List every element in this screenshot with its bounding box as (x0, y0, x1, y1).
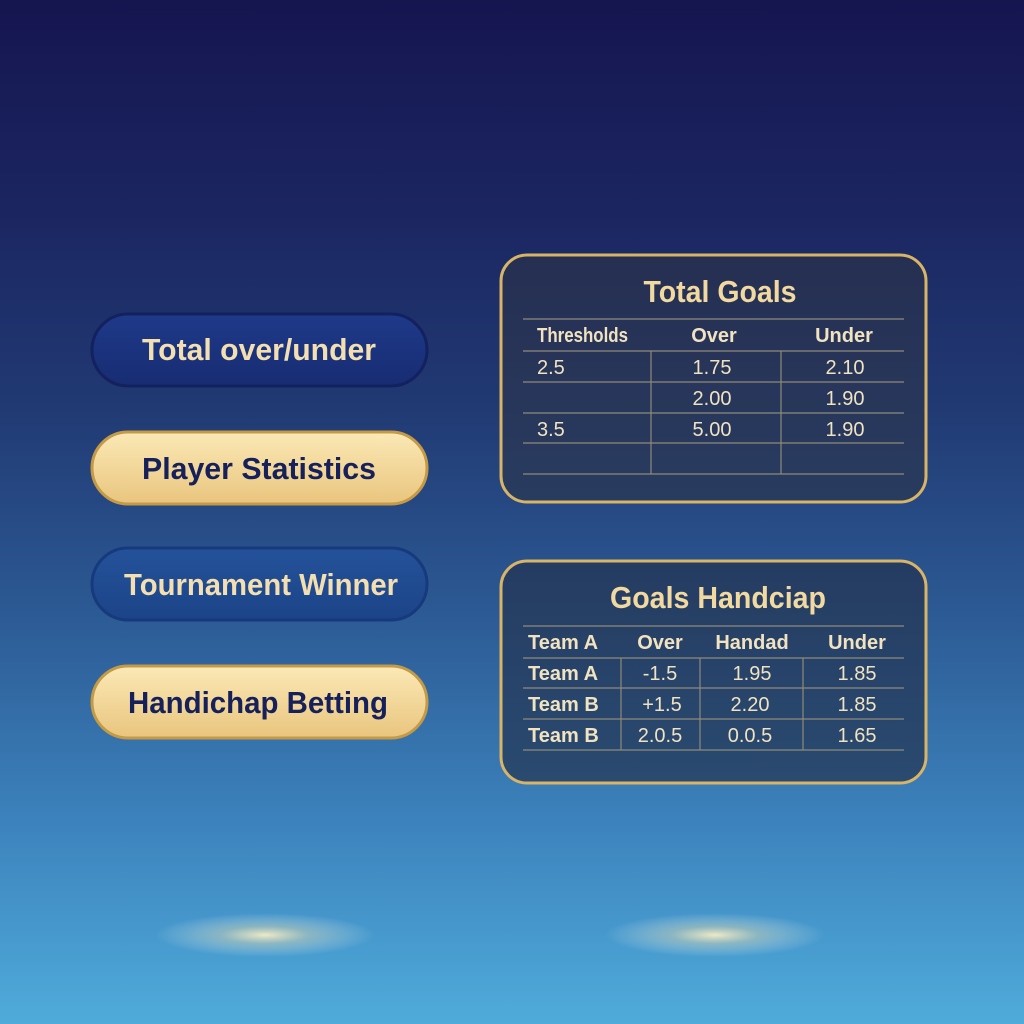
table: goals handicap (528, 632, 886, 747)
floor glow left (155, 913, 375, 957)
button: Handichap Betting: Handichap Betting (128, 685, 388, 720)
table: total goals: 2.5 (537, 357, 565, 379)
title: Goals Handciap: Goals Handciap (610, 580, 826, 615)
table: goals handicap: -1.5 (643, 663, 677, 685)
table: goals handicap: +1.5 (642, 694, 682, 716)
table: goals handicap: Handad (715, 632, 789, 654)
table: goals handicap: 1.65 (838, 725, 876, 747)
table: total goals: 2.00 (693, 388, 731, 410)
table: total goals (537, 325, 873, 441)
table: goals handicap: Over (637, 632, 683, 654)
table: total goals: 1.90 (826, 419, 864, 441)
floor glow right (605, 913, 825, 957)
table: goals handicap: Under (828, 632, 886, 654)
table: goals handicap: 1.85 (838, 694, 876, 716)
table: total goals: 1.90 (826, 388, 864, 410)
table: total goals: 2.10 (826, 357, 864, 379)
table: total goals: 5.00 (693, 419, 731, 441)
button: Total over/under (92, 314, 427, 386)
table: total goals: 3.5 (537, 419, 565, 441)
table: goals handicap: 1.95 (733, 663, 771, 685)
button: Tournament Winner (92, 548, 427, 620)
table: total goals: Thresholds (537, 325, 628, 347)
table: total goals: Over (691, 325, 737, 347)
table: total goals: 1.75 (693, 357, 731, 379)
table: goals handicap: Team A (528, 632, 598, 654)
table: goals handicap: 0.0.5 (728, 725, 772, 747)
table: goals handicap: Team A (528, 663, 598, 685)
table: goals handicap: 2.0.5 (638, 725, 682, 747)
table: total goals: Under (815, 325, 873, 347)
table: goals handicap: 1.85 (838, 663, 876, 685)
table: goals handicap: Team B (528, 725, 599, 747)
table: goals handicap: 2.20 (731, 694, 769, 716)
title: Total Goals: Total Goals (644, 274, 796, 309)
panel: Goals Handicap (501, 561, 926, 783)
button: Tournament Winner: Tournament Winner (124, 567, 398, 602)
button: Player Statistics: Player Statistics (142, 451, 376, 486)
button: Player Statistics (92, 432, 427, 504)
table: goals handicap: Team B (528, 694, 599, 716)
button: Total over/under: Total over/under (142, 332, 376, 367)
button: Handichap Betting (92, 666, 427, 738)
panel: Total Goals (501, 255, 926, 502)
